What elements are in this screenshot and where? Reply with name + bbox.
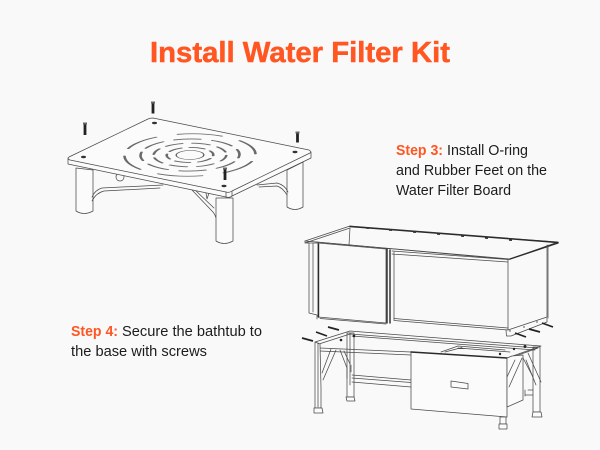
circular slots	[99, 126, 281, 184]
step 4 text: the base with screws	[71, 344, 207, 360]
illustration: base frame with drawer	[314, 331, 542, 429]
title: Install Water Filter Kit	[150, 37, 450, 69]
step 4 text	[71, 324, 262, 360]
step 3 text: Install O-ring	[447, 143, 528, 159]
back legs	[346, 333, 542, 417]
illustration: bathtub	[302, 226, 558, 341]
illustration: water filter board	[68, 102, 311, 244]
front right leg and braces	[499, 358, 533, 429]
cross rail	[352, 375, 411, 387]
step 3 text: and Rubber Feet on the	[396, 163, 547, 179]
step 4 text: Secure the bathtub to	[122, 324, 262, 340]
tub side panel and bracket	[506, 245, 548, 336]
mounting holes	[81, 122, 298, 187]
drawer handle	[451, 381, 468, 389]
filter board plate	[68, 118, 311, 197]
step 3 text: Water Filter Board	[396, 183, 511, 199]
screws	[85, 102, 298, 180]
drawer	[411, 352, 523, 417]
screws around tub	[302, 323, 553, 341]
step 4 text: Step 4:	[71, 324, 118, 340]
step 3 text: Step 3:	[396, 143, 443, 159]
tub rim	[305, 226, 558, 260]
legs of filter board	[76, 162, 303, 244]
base top frame	[315, 331, 541, 358]
tub front panels	[309, 243, 508, 330]
step 3 text	[396, 143, 547, 199]
front left leg and braces	[314, 342, 351, 413]
